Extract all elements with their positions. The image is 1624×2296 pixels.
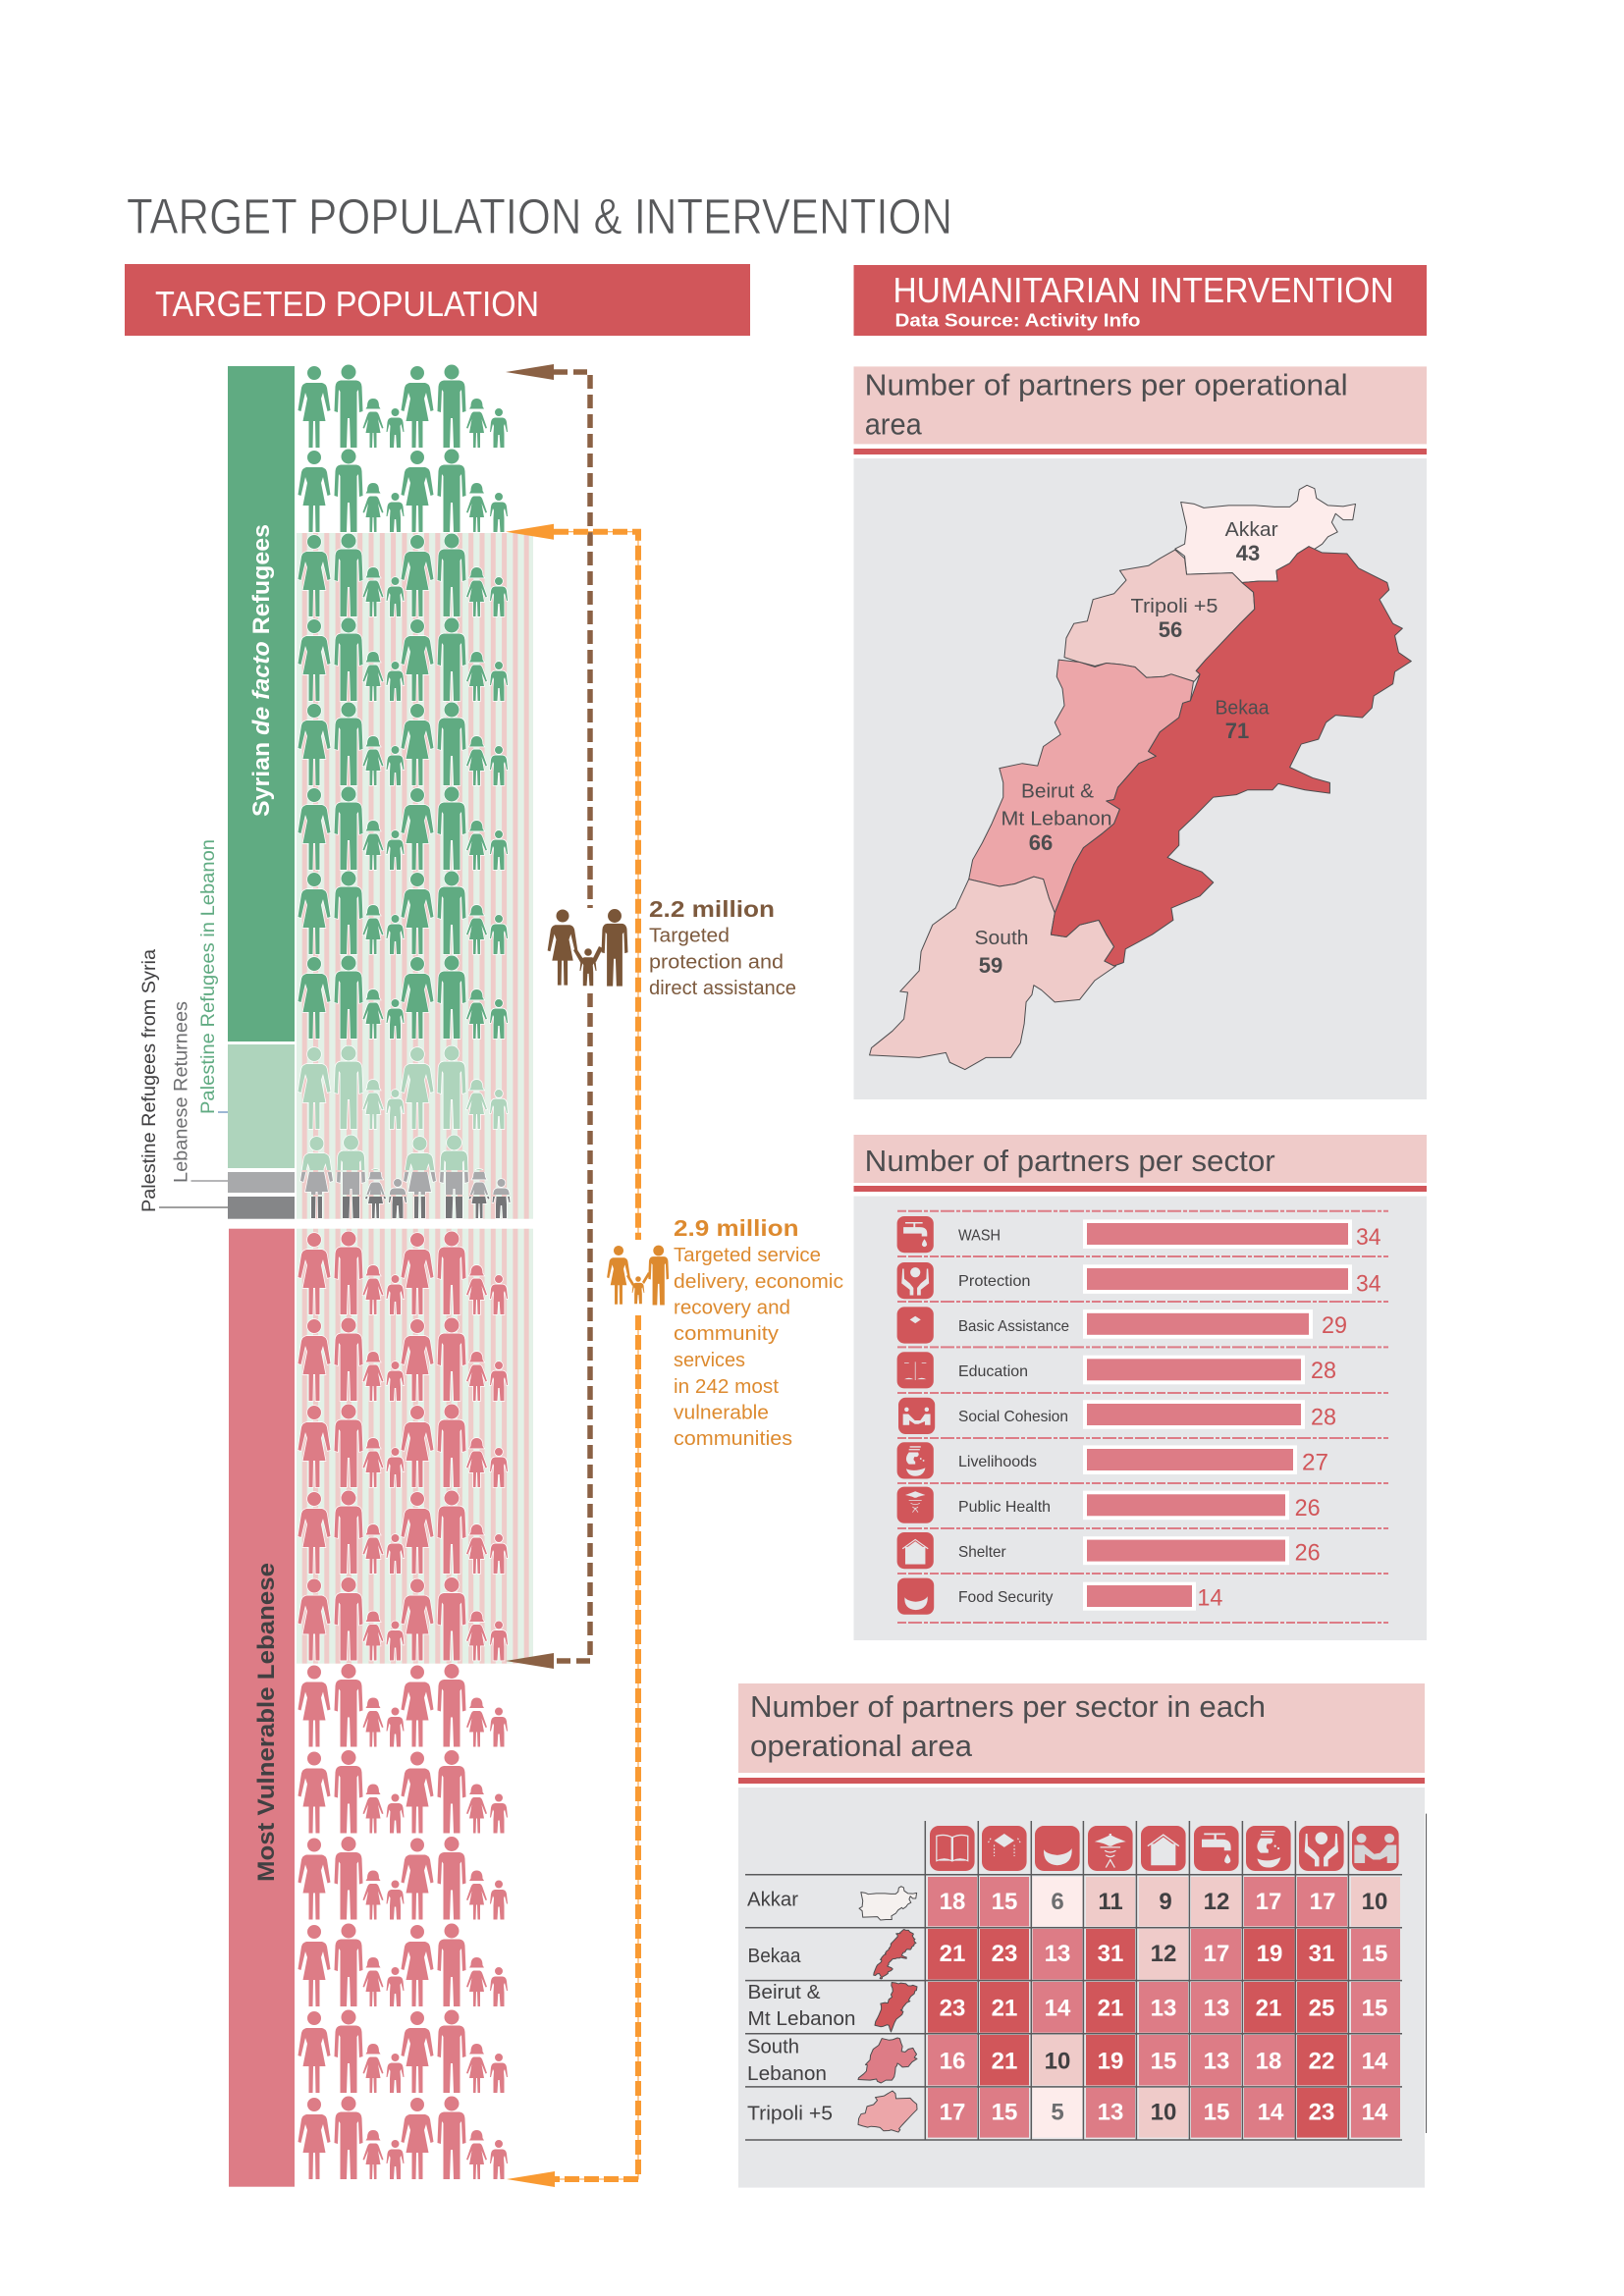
table row: Tripoli +5: 5 xyxy=(1051,2100,1064,2126)
map background xyxy=(854,458,1427,1099)
heading: partners per sector in each area: operational area xyxy=(750,1729,973,1763)
sector panel background xyxy=(854,1197,1427,1640)
heading: partners per sector xyxy=(854,1135,1427,1192)
callout: 2.2 million: Targeted xyxy=(649,925,730,946)
stacked bar: most vulnerable Lebanese: Most Vulnerable Lebanese xyxy=(253,1563,280,1882)
arrow: orange bracket xyxy=(506,524,638,2187)
table row: Bekaa: 19 xyxy=(1257,1941,1282,1967)
bar row: Basic Assistance: 29 xyxy=(1322,1312,1347,1339)
table row: South Lebanon xyxy=(747,2035,1400,2085)
table row: Akkar: Akkar xyxy=(747,1889,798,1910)
heading: partners per sector: Number of partners per sector xyxy=(865,1144,1275,1178)
stacked bar: Lebanese returnees xyxy=(228,1172,295,1193)
callout: 2.2 million: 2.2 million xyxy=(649,896,775,922)
stacked bar: Palestine refugees in Lebanon xyxy=(228,1044,295,1168)
heading: partners per operational area: Number of partners per operational xyxy=(865,367,1348,401)
callout: 2.9 million: Targeted service xyxy=(674,1244,821,1266)
panel: partners per operational area xyxy=(854,366,1427,1099)
bar row: Protection: Protection xyxy=(958,1273,1031,1290)
panel: humanitarian intervention header xyxy=(854,265,1427,336)
table row: Akkar: 15 xyxy=(992,1889,1017,1915)
table row: South Lebanon: South xyxy=(747,2036,799,2057)
table header icons xyxy=(930,1826,1399,1871)
bar row: Food Security xyxy=(897,1578,1222,1615)
map labels: 43 xyxy=(1236,541,1260,565)
table row: Beirut and Mt Lebanon: 21 xyxy=(1098,1995,1123,2022)
bar row: Education xyxy=(897,1352,1336,1388)
table row: Beirut and Mt Lebanon: 25 xyxy=(1309,1995,1334,2022)
table row: South Lebanon: 18 xyxy=(1256,2049,1281,2075)
table row: Akkar: 12 xyxy=(1204,1889,1229,1915)
table row: Beirut and Mt Lebanon: Beirut & xyxy=(748,1982,821,2003)
bar row: Livelihoods: 27 xyxy=(1302,1449,1328,1476)
callout: 2.9 million: in 242 most xyxy=(674,1375,779,1398)
icon: orange family xyxy=(607,1246,669,1305)
map labels: 56 xyxy=(1159,617,1182,642)
table row: Bekaa xyxy=(748,1929,1400,1980)
map labels: 71 xyxy=(1225,719,1249,743)
callout: 2.2 million: protection and xyxy=(649,950,784,974)
pictogram: vulnerable Lebanese family rows xyxy=(298,1231,508,2179)
table row: Akkar: 17 xyxy=(1256,1889,1281,1915)
bar row: Food Security: Food Security xyxy=(958,1589,1053,1606)
table row: Bekaa: 31 xyxy=(1309,1941,1334,1967)
heading: partners per sector in each area xyxy=(738,1683,1425,1784)
table row: Beirut and Mt Lebanon: 13 xyxy=(1151,1995,1176,2022)
table row: Tripoli +5: 15 xyxy=(1204,2100,1229,2126)
callout: 2.9 million: services xyxy=(674,1349,745,1371)
map labels: Mt Lebanon xyxy=(1001,809,1111,830)
bar row: Protection: 34 xyxy=(1356,1270,1380,1298)
table row: Akkar xyxy=(747,1877,1400,1926)
map labels: Bekaa xyxy=(1216,697,1270,719)
pictogram: Palestine refugees in Lebanon family row xyxy=(298,1046,508,1129)
bar row: Livelihoods: Livelihoods xyxy=(958,1454,1037,1470)
heading: partners per operational area xyxy=(854,366,1427,454)
bar row: WASH xyxy=(897,1216,1380,1253)
table row: Tripoli +5: 17 xyxy=(940,2100,965,2126)
callout: 2.9 million: delivery, economic xyxy=(674,1270,843,1293)
table row: Tripoli +5: 14 xyxy=(1258,2100,1284,2126)
panel: humanitarian intervention header: Data Source: Activity Info xyxy=(895,310,1141,330)
panel: partners per sector xyxy=(854,1135,1427,1640)
bar row: Social Cohesion: Social Cohesion xyxy=(958,1409,1068,1425)
table row: Bekaa: 31 xyxy=(1098,1941,1123,1967)
table row: Bekaa: 17 xyxy=(1204,1941,1229,1967)
table edge line xyxy=(1426,1814,1428,2133)
title: TARGET POPULATION & INTERVENTION xyxy=(127,188,952,244)
table row: Beirut and Mt Lebanon: 15 xyxy=(1362,1995,1387,2022)
panel: targeted population header: TARGETED POPULATION xyxy=(155,284,539,324)
bar row: WASH: WASH xyxy=(958,1227,1001,1244)
table row: Tripoli +5: 14 xyxy=(1362,2100,1388,2126)
table row: Akkar: 17 xyxy=(1310,1889,1335,1915)
table row: Akkar: 6 xyxy=(1051,1889,1064,1915)
stacked bar: Syrian de facto refugees xyxy=(228,366,295,1041)
callout: 2.2 million: direct assistance xyxy=(649,977,796,999)
callout: 2.9 million: communities xyxy=(674,1427,792,1450)
map labels: 59 xyxy=(979,953,1002,978)
heading: partners per operational area: area xyxy=(865,407,922,442)
table row: Bekaa: 15 xyxy=(1362,1941,1387,1967)
panel: partners per sector in each area xyxy=(738,1683,1426,2188)
label: Lebanese Returnees: Lebanese Returnees xyxy=(171,1001,192,1183)
heading: partners per sector in each area: Number of partners per sector in each xyxy=(750,1689,1266,1724)
table row: Tripoli +5: 23 xyxy=(1309,2100,1334,2126)
table row: Beirut and Mt Lebanon: 13 xyxy=(1204,1995,1229,2022)
striped band: targeted background lower xyxy=(297,1229,533,1664)
table row: Beirut and Mt Lebanon: 21 xyxy=(1256,1995,1281,2022)
map labels: South xyxy=(974,928,1029,949)
table row: Akkar: 18 xyxy=(940,1889,965,1915)
table row: South Lebanon: 13 xyxy=(1204,2049,1229,2075)
table row: South Lebanon: 14 xyxy=(1362,2049,1388,2075)
table row: South Lebanon: 19 xyxy=(1098,2049,1123,2075)
icon: brown family xyxy=(548,909,627,987)
callout: 2.9 million: recovery and xyxy=(674,1296,790,1319)
pictogram: Syrian refugee family rows xyxy=(298,365,508,1039)
table row: South Lebanon: 21 xyxy=(992,2049,1017,2075)
table row: Bekaa: 13 xyxy=(1045,1941,1070,1967)
pictogram: split family row by group xyxy=(300,1135,511,1218)
bar row: Public Health: Public Health xyxy=(958,1499,1051,1516)
callout: 2.9 million: 2.9 million xyxy=(674,1215,799,1241)
bar row: WASH: 34 xyxy=(1356,1224,1380,1251)
table row: South Lebanon: Lebanon xyxy=(747,2063,827,2085)
panel: humanitarian intervention header: HUMANITARIAN INTERVENTION xyxy=(893,270,1394,310)
table row: Tripoli +5 xyxy=(747,2088,1400,2138)
table row: Beirut and Mt Lebanon: 14 xyxy=(1045,1995,1071,2022)
table row: Tripoli +5: Tripoli +5 xyxy=(747,2103,833,2124)
bar row: Shelter: Shelter xyxy=(958,1544,1006,1561)
label: Palestine Refugees from Syria: Palestine Refugees from Syria xyxy=(139,949,160,1212)
bar row: Shelter xyxy=(897,1532,1321,1569)
table row: Beirut and Mt Lebanon: 23 xyxy=(940,1995,965,2022)
bar row: Social Cohesion: 28 xyxy=(1311,1404,1336,1431)
callout: 2.2 million xyxy=(649,896,796,999)
map labels xyxy=(974,519,1278,978)
stacked bar: most vulnerable Lebanese xyxy=(229,1229,295,2187)
table row: South Lebanon: 22 xyxy=(1309,2049,1334,2075)
label: Palestine Refugees in Lebanon: Palestine Refugees in Lebanon xyxy=(198,839,219,1114)
table row: Akkar: 9 xyxy=(1159,1889,1172,1915)
bar row: Education: Education xyxy=(958,1363,1028,1380)
bar row: Shelter: 26 xyxy=(1295,1539,1321,1567)
table row: Bekaa: 21 xyxy=(940,1941,965,1967)
map labels: Tripoli +5 xyxy=(1131,596,1218,617)
stacked bar: Palestine refugees from Syria xyxy=(228,1197,295,1219)
map labels: 66 xyxy=(1029,830,1053,855)
map: Lebanon regions xyxy=(870,485,1411,1070)
table row: Akkar: 10 xyxy=(1362,1889,1387,1915)
bar row: Public Health xyxy=(897,1487,1321,1523)
table row: South Lebanon: 10 xyxy=(1045,2049,1070,2075)
bar row: Livelihoods xyxy=(897,1442,1328,1478)
map labels: Beirut & xyxy=(1021,781,1095,803)
panel: targeted population header xyxy=(125,264,750,336)
bar row: Basic Assistance xyxy=(897,1307,1347,1344)
arrow: brown bracket xyxy=(506,364,590,1669)
table row: Tripoli +5: 13 xyxy=(1098,2100,1123,2126)
table row: Beirut and Mt Lebanon: Mt Lebanon xyxy=(748,2008,856,2030)
table row: Beirut and Mt Lebanon xyxy=(748,1982,1400,2033)
table row: Bekaa: 12 xyxy=(1151,1941,1176,1967)
bar row: Public Health: 26 xyxy=(1295,1495,1321,1522)
map labels: Akkar xyxy=(1225,519,1278,541)
table background xyxy=(738,1788,1425,2188)
bar row: Education: 28 xyxy=(1311,1358,1336,1384)
table row: Tripoli +5: 10 xyxy=(1151,2100,1176,2126)
callout: 2.9 million xyxy=(674,1215,843,1450)
callout: 2.9 million: vulnerable xyxy=(674,1402,769,1423)
bar row: Food Security: 14 xyxy=(1197,1584,1222,1612)
table row: Beirut and Mt Lebanon: 21 xyxy=(992,1995,1017,2022)
table row: Bekaa: 23 xyxy=(992,1941,1017,1967)
table row: South Lebanon: 15 xyxy=(1151,2049,1176,2075)
table row: South Lebanon: 16 xyxy=(940,2049,965,2075)
bar row: Protection xyxy=(897,1262,1380,1299)
table row: Akkar: 11 xyxy=(1098,1889,1123,1915)
bar row: Basic Assistance: Basic Assistance xyxy=(958,1318,1069,1335)
table row: Bekaa: Bekaa xyxy=(748,1946,801,1967)
stacked bar: Syrian de facto refugees: Syrian de facto Refugees xyxy=(248,524,275,817)
callout: 2.9 million: community xyxy=(674,1322,780,1345)
table row: Tripoli +5: 15 xyxy=(992,2100,1017,2126)
bar row: Social Cohesion xyxy=(898,1398,1336,1434)
striped band: targeted background upper xyxy=(297,533,533,1219)
